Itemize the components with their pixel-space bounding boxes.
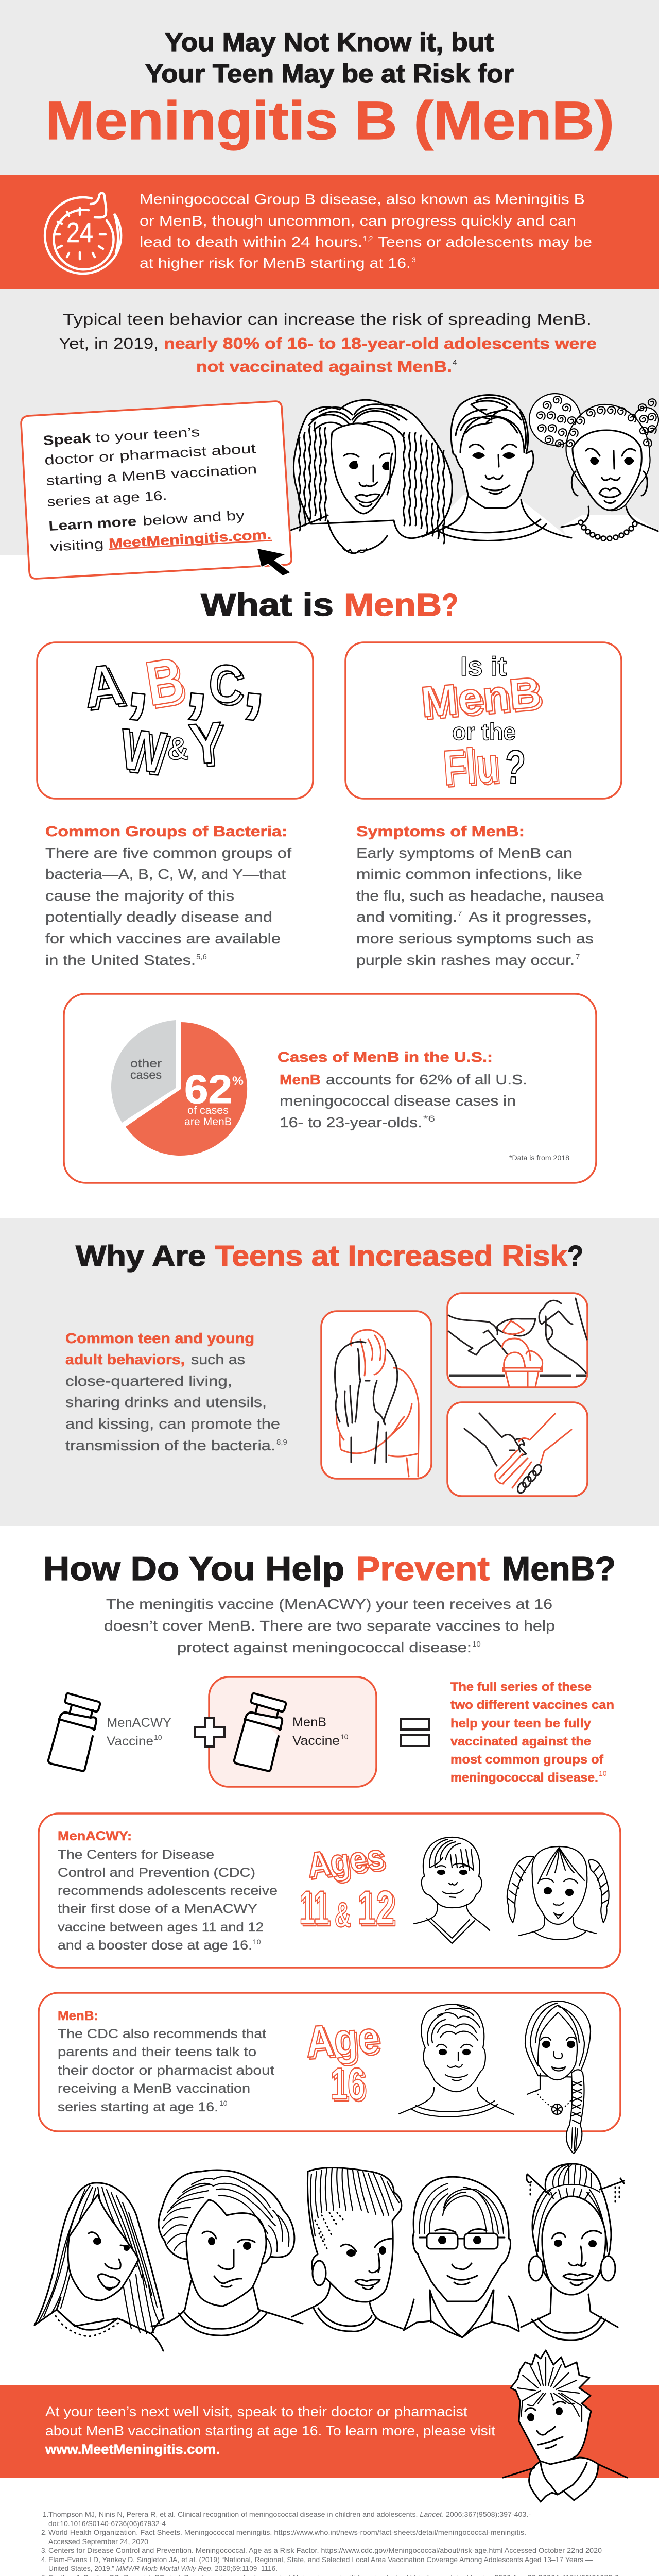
text block: symptoms of menb: 7 <box>458 909 462 918</box>
text: menacwy: Control and Prevention (CDC) <box>58 1866 255 1880</box>
lettering: ages 11 and 12: 12 <box>357 1882 394 1934</box>
lettering: ages 11 and 12: 11 <box>299 1882 329 1934</box>
lettering: A, B, C, W and Y: , <box>239 627 273 727</box>
panel: menb recommendation <box>39 1993 620 2154</box>
icon: plus sign <box>195 1718 224 1747</box>
banner text: Teens or adolescents may be <box>378 234 592 250</box>
callout: full series: two different vaccines can <box>450 1698 614 1712</box>
lettering: A, B, C, W and Y: , <box>182 627 216 727</box>
text block: vaccine intro: doesn’t cover MenB. There are two separate vaccines to help <box>104 1618 555 1634</box>
callout: speak to your teen <box>21 401 291 579</box>
callout: speak to your teen: Learn more <box>48 513 137 534</box>
text block: teen behaviors: transmission of the bacteria. <box>65 1437 275 1453</box>
lettering: A, B, C, W and Y <box>80 627 273 788</box>
text block: teen behaviors: and kissing, can promote the <box>65 1416 280 1432</box>
text block: teen behaviors: Common teen and young <box>65 1330 254 1346</box>
text: menb: series starting at age 16. <box>58 2100 218 2114</box>
lettering: ages 11 and 12 <box>299 1837 396 1936</box>
title <box>45 28 614 151</box>
heading: why are teens at increased risk <box>76 1240 583 1273</box>
callout: speak to your teen: visiting <box>50 536 104 554</box>
illustration: three teens <box>291 394 659 555</box>
lettering: Is it MenB or the Flu: or the <box>452 718 516 745</box>
label: menacwy vaccine: 10 <box>154 1733 162 1741</box>
panel: menb or flu lettering <box>345 642 621 799</box>
lettering: A, B, C, W and Y: W <box>120 720 172 788</box>
banner text: 1,2 <box>363 234 373 243</box>
text: cases of menb in the us: accounts for 62% of all U.S. <box>326 1072 527 1088</box>
references list: 4. <box>41 2556 47 2564</box>
illustration: 16 year old girl with braid <box>525 2001 591 2154</box>
text block: symptoms of menb <box>356 823 604 968</box>
references list: Thompson MJ, Ninis N, Perera R, et al. Clinical recognition of meningococcal disease in children and adolescents. Lancet. 2006;367(9508):397-403.- <box>48 2511 531 2518</box>
callout: full series: most common groups of <box>450 1753 604 1767</box>
text block: symptoms of menb: mimic common infections, like <box>356 866 582 882</box>
text block: common groups of bacteria: bacteria—A, B, C, W, and Y—that <box>45 866 286 882</box>
text: menacwy: their first dose of a MenACWY <box>58 1902 257 1916</box>
pie chart: 62 percent of cases are MenB: other <box>130 1057 162 1070</box>
callout: speak to your teen: to your teen’s <box>95 424 200 445</box>
lettering: Is it MenB or the Flu: Flu <box>441 737 500 796</box>
pie chart: 62 percent of cases are MenB: 62 <box>184 1066 232 1112</box>
banner text: about MenB vaccination starting at age 16. To learn more, please visit <box>45 2423 496 2438</box>
panel: menacwy recommendation <box>39 1814 620 1968</box>
references list: Centers for Disease Control and Prevention. Meningococcal. Age as a Risk Factor. https://www.cdc.gov/Meningococcal/about/risk-age.html Accessed October 22nd 2020 <box>48 2547 602 2554</box>
banner text <box>140 191 592 271</box>
label: menacwy vaccine: MenACWY <box>107 1716 171 1730</box>
text: menacwy: MenACWY: <box>58 1829 132 1843</box>
text block: teen behaviors: 8,9 <box>276 1438 287 1447</box>
text block: common groups of bacteria: 5,6 <box>196 953 207 961</box>
icon: menacwy vial <box>48 1693 100 1771</box>
teen: girl with curly buns <box>529 394 658 541</box>
lettering: Is it MenB or the Flu: Is it <box>460 652 507 682</box>
teen: boy with glasses <box>404 2177 519 2337</box>
banner text: lead to death within 24 hours. <box>140 234 362 250</box>
panel: menb highlight <box>209 1677 376 1787</box>
text: menb: MenB: <box>58 2009 98 2023</box>
panel: handshake illustration <box>447 1402 587 1496</box>
illustration: 16 year old boy <box>399 2004 514 2117</box>
heading: what is menb: What is <box>201 587 334 623</box>
text: menb: receiving a MenB vaccination <box>58 2081 250 2096</box>
text: cases of menb in the us: Cases of MenB in the U.S.: <box>278 1049 493 1065</box>
text block: teen behaviors: sharing drinks and utensils, <box>65 1394 267 1410</box>
banner text: at higher risk for MenB starting at 16. <box>140 255 411 271</box>
illustration: 11 year old girl with braids <box>507 1846 609 1940</box>
text block: vaccine intro: The meningitis vaccine (MenACWY) your teen receives at 16 <box>106 1596 552 1612</box>
icon: mouse cursor <box>257 549 290 575</box>
lettering: ages 11 and 12: 11 <box>301 1884 331 1936</box>
lettering: A, B, C, W and Y: A <box>80 651 127 720</box>
callout: speak to your teen: MeetMeningitis.com. <box>108 527 272 551</box>
text block: teen behavior statistic <box>59 310 597 376</box>
text block: teen behavior statistic: 4 <box>453 359 457 367</box>
heading: what is menb: MenB <box>344 587 442 623</box>
panel: shared spoon illustration <box>447 1293 587 1387</box>
text: menb <box>58 2009 274 2114</box>
callout: full series: The full series of these <box>450 1680 592 1694</box>
heading: why are teens at increased risk: Why Are <box>76 1240 206 1273</box>
banner text: www.MeetMeningitis.com. <box>45 2442 220 2457</box>
illustration: five teens <box>34 2164 624 2351</box>
lettering: A, B, C, W and Y: Y <box>189 713 229 780</box>
references list: World Health Organization. Fact Sheets. Meningococcal meningitis. https://www.who.int/news-room/fact-sheets/detail/meningococcal-meningitis. <box>48 2529 526 2536</box>
lettering: Is it MenB or the Flu: Flu <box>443 739 502 798</box>
teen: girl with long straight hair <box>34 2183 164 2351</box>
text block: symptoms of menb: As it progresses, <box>469 909 592 925</box>
callout: full series: 10 <box>599 1769 607 1777</box>
text block: common groups of bacteria: There are five common groups of <box>45 845 291 861</box>
teen: boy with swept hair <box>422 395 571 540</box>
text block: teen behaviors: adult behaviors, <box>65 1351 185 1367</box>
callout: full series: vaccinated against the <box>450 1735 591 1749</box>
panel: kissing illustration <box>321 1311 431 1479</box>
text block: vaccine intro <box>104 1596 555 1655</box>
pie chart: 62 percent of cases are MenB <box>111 1020 247 1156</box>
text: cases of menb in the us: meningococcal disease cases in <box>280 1093 516 1109</box>
heading: how do you help prevent menb: MenB? <box>502 1550 616 1587</box>
references list: Accessed September 24, 2020 <box>48 2538 148 2546</box>
references list: United States, 2019.” MMWR Morb Mortal Wkly Rep. 2020;69:1109–1116. <box>48 2565 278 2572</box>
heading: how do you help prevent menb: How Do You Help <box>43 1550 344 1587</box>
lettering: ages 11 and 12: 12 <box>359 1884 396 1936</box>
text block: vaccine intro: 10 <box>472 1640 481 1649</box>
text block: teen behaviors <box>65 1330 287 1453</box>
text: menacwy: The Centers for Disease <box>58 1848 214 1862</box>
banner text: 3 <box>412 256 416 264</box>
text block: symptoms of menb: Early symptoms of MenB can <box>356 845 573 861</box>
heading: what is menb <box>201 587 458 623</box>
text block: teen behaviors: close-quartered living, <box>65 1373 232 1389</box>
text block: vaccine intro: protect against meningococcal disease: <box>177 1639 472 1655</box>
callout: speak to your teen: series at age 16. <box>47 487 167 510</box>
lettering: age 16 <box>304 2012 383 2111</box>
text: menacwy: and a booster dose at age 16. <box>58 1938 252 1953</box>
text block: symptoms of menb: 7 <box>576 953 580 961</box>
lettering: age 16: Age <box>306 2014 383 2069</box>
lettering: A, B, C, W and Y: A <box>83 654 130 723</box>
pie chart: 62 percent of cases are MenB: % <box>232 1074 244 1088</box>
text: cases of menb in the us: MenB <box>280 1072 321 1088</box>
pie chart: 62 percent of cases are MenB: of cases <box>187 1105 229 1116</box>
text block: symptoms of menb: and vomiting. <box>356 909 457 925</box>
references list <box>38 2511 619 2576</box>
text: menb: The CDC also recommends that <box>58 2027 266 2041</box>
text: cases of menb in the us: 16- to 23-year-olds. <box>280 1114 422 1130</box>
lettering: A, B, C, W and Y: C <box>207 654 244 715</box>
references list: 3. <box>41 2547 47 2554</box>
banner text: At your teen’s next well visit, speak to their doctor or pharmacist <box>45 2404 468 2419</box>
banner text <box>45 2404 496 2457</box>
lettering: A, B, C, W and Y: B <box>141 644 188 719</box>
callout: full series: meningococcal disease. <box>450 1771 598 1785</box>
lettering: A, B, C, W and Y: W <box>117 717 169 785</box>
heading: why are teens at increased risk: Teens at Increased Risk <box>215 1240 567 1273</box>
teen: shaved side pompadour <box>292 2168 403 2331</box>
lettering: A, B, C, W and Y: Y <box>186 710 226 777</box>
text: cases of menb in the us <box>278 1049 527 1130</box>
references list: 1. <box>43 2511 48 2518</box>
lettering: A, B, C, W and Y: C <box>210 656 246 717</box>
footnote: data year: *Data is from 2018 <box>509 1154 569 1162</box>
title: You May Not Know it, but <box>165 28 494 57</box>
text: menacwy: vaccine between ages 11 and 12 <box>58 1920 264 1935</box>
references list: Elam-Evans LD, Yankey D, Singleton JA, et al. (2019) “National, Regional, State, and Selected Local Area Vaccination Coverage Among Adolescents Aged 13–17 Years — <box>48 2556 593 2564</box>
vaccine equation <box>48 1677 614 1787</box>
callout: speak to your teen: below and by <box>142 507 245 529</box>
references list: 2. <box>41 2529 47 2536</box>
text: menacwy: 10 <box>253 1938 261 1946</box>
panel: orange definition banner <box>0 175 659 289</box>
label: menb vaccine: 10 <box>340 1733 349 1741</box>
text block: teen behavior statistic: nearly 80% of 16- to 18-year-old adolescents were <box>164 334 597 352</box>
icon: 24 hour clock <box>45 193 121 274</box>
heading: why are teens at increased risk: ? <box>567 1240 583 1273</box>
callout: speak to your teen: doctor or pharmacist about <box>44 440 257 468</box>
text block: symptoms of menb: more serious symptoms such as <box>356 930 594 946</box>
heading: how do you help prevent menb: Prevent <box>356 1550 490 1587</box>
panel: bacteria groups lettering <box>37 627 313 799</box>
teen: wavy short hair <box>151 2170 303 2335</box>
panel: cases of menb <box>64 994 596 1183</box>
text block: common groups of bacteria: potentially deadly disease and <box>45 909 272 925</box>
icon: menb vial <box>234 1693 286 1771</box>
text block: symptoms of menb: Symptoms of MenB: <box>356 823 525 839</box>
lettering: ages 11 and 12: & <box>335 1895 351 1935</box>
teen: wavy haired girl <box>291 400 452 553</box>
text block: common groups of bacteria: in the United States. <box>45 952 196 968</box>
text block: common groups of bacteria: Common Groups of Bacteria: <box>45 823 287 839</box>
lettering: age 16: Age <box>304 2012 381 2067</box>
lettering: Is it MenB or the Flu <box>419 652 546 798</box>
callout: speak to your teen: Speak <box>43 430 92 448</box>
text block: teen behavior statistic: Typical teen behavior can increase the risk of spreading MenB. <box>63 310 592 328</box>
callout: full series: help your teen be fully <box>450 1717 592 1731</box>
text block: teen behavior statistic: not vaccinated against MenB. <box>196 358 452 376</box>
text block: common groups of bacteria: cause the majority of this <box>45 888 234 904</box>
heading: how do you help prevent menb <box>43 1550 616 1587</box>
pie chart: 62 percent of cases are MenB: cases <box>130 1068 162 1081</box>
lettering: age 16: 16 <box>332 2061 367 2111</box>
text block: symptoms of menb: purple skin rashes may occur. <box>356 952 575 968</box>
illustration: spiky haired boy <box>503 2350 627 2502</box>
teen: girl with bun and hoops <box>521 2164 624 2340</box>
lettering: A, B, C, W and Y: , <box>123 627 158 727</box>
text block: symptoms of menb: the flu, such as headache, nausea <box>356 888 604 904</box>
title: Your Teen May be at Risk for <box>145 59 514 88</box>
lettering: Is it MenB or the Flu: MenB <box>421 670 546 729</box>
page backgrounds <box>0 0 659 1526</box>
label: menb vaccine: MenB <box>292 1715 326 1730</box>
label: menacwy vaccine: Vaccine <box>107 1734 153 1749</box>
panel: closing banner <box>0 2350 659 2502</box>
pie chart: 62 percent of cases are MenB: are MenB <box>184 1116 232 1128</box>
title: Meningitis B (MenB) <box>45 91 614 151</box>
text: cases of menb in the us: *6 <box>423 1114 435 1124</box>
text block: teen behavior statistic: Yet, in 2019, <box>59 334 159 352</box>
text: menb: 10 <box>219 2099 228 2107</box>
lettering: ages 11 and 12: Ages <box>307 1839 389 1887</box>
text block: common groups of bacteria <box>45 823 291 968</box>
text: menb: their doctor or pharmacist about <box>58 2063 274 2078</box>
label: menb vaccine <box>292 1715 349 1748</box>
references list: doi:10.1016/S0140-6736(06)67932-4 <box>48 2520 166 2528</box>
icon: 24 hour clock: 24 <box>66 216 93 248</box>
lettering: age 16: 16 <box>330 2059 365 2109</box>
label: menacwy vaccine <box>107 1716 171 1749</box>
callout: full series <box>450 1680 614 1785</box>
heading: what is menb: ? <box>442 587 458 623</box>
text: menb: parents and their teens talk to <box>58 2045 256 2059</box>
banner text: Meningococcal Group B disease, also known as Meningitis B <box>140 191 585 207</box>
text: menacwy <box>58 1829 278 1953</box>
text block: common groups of bacteria: for which vaccines are available <box>45 930 281 946</box>
label: menb vaccine: Vaccine <box>292 1734 340 1748</box>
icon: equals sign <box>401 1719 429 1746</box>
lettering: Is it MenB or the Flu: ? <box>503 740 527 794</box>
lettering: A, B, C, W and Y: B <box>144 647 191 722</box>
callout: speak to your teen: starting a MenB vaccination <box>46 461 257 488</box>
text: menacwy: recommends adolescents receive <box>58 1884 278 1898</box>
banner text: or MenB, though uncommon, can progress quickly and can <box>140 213 576 229</box>
lettering: Is it MenB or the Flu: MenB <box>419 668 543 726</box>
lettering: ages 11 and 12: Ages <box>305 1837 387 1885</box>
lettering: A, B, C, W and Y: & <box>167 732 189 766</box>
illustration: 11 year old boy <box>414 1837 490 1943</box>
text block: teen behaviors: such as <box>191 1351 245 1367</box>
